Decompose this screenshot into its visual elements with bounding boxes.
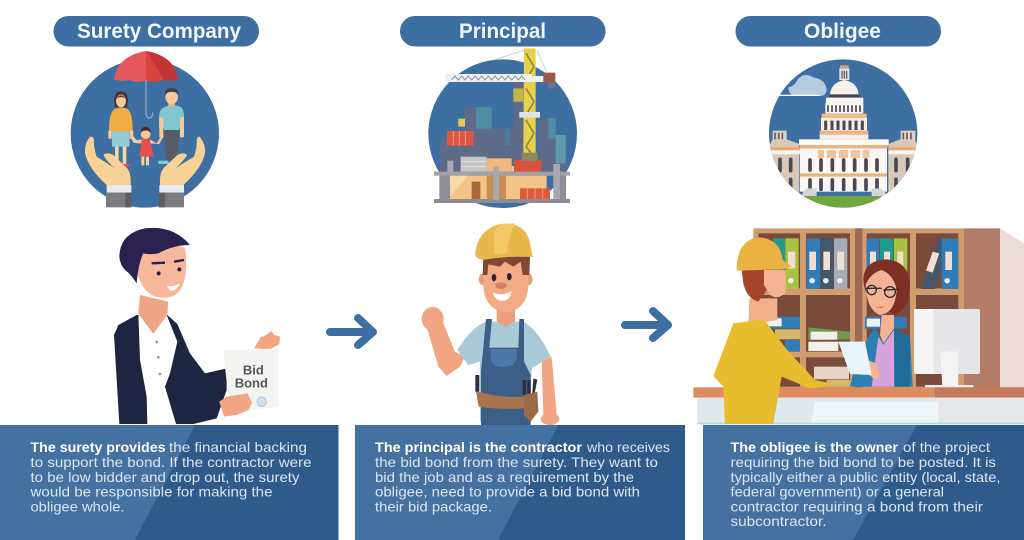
character: surety businessman with bid bond [114,228,280,424]
dome [820,65,868,139]
shirt [457,322,551,422]
text: principal: obligee, need to provide a bid bond with [375,484,640,500]
text: surety: obligee whole. [30,498,124,514]
head [479,257,533,312]
crane [445,48,555,157]
text: surety: to be low bidder and drop out, the surety [30,469,300,485]
text: obligee: federal government) or a general [730,484,944,500]
child [130,127,164,165]
monitor [914,309,980,388]
tool belt [476,391,525,409]
visitor in hard hat [713,237,827,424]
hanging load [447,119,473,146]
hard hat [475,224,533,260]
heading pill: Surety Company [54,16,259,46]
man [158,88,184,164]
character: principal construction worker [422,223,559,425]
overalls [481,319,531,425]
heading pill: Surety Company: Surety Company [77,20,241,43]
shirt [138,313,177,424]
receptionist [850,259,913,387]
lowering arm [542,357,557,415]
text: principal: bid the job and as a requirement by the [375,469,634,485]
text: obligee: typically either a public entity (local, state, [730,469,1000,485]
heading pill: Principal [400,16,606,46]
heading pill: Principal: Principal [459,20,546,43]
text: principal: who receives [586,439,670,455]
panel: principal description [355,425,685,540]
woman [108,91,133,167]
lawn [804,196,883,208]
document: Bid Bond [223,348,278,414]
text: principal: their bid package. [375,498,492,514]
icon: capitol building [767,59,920,209]
neck and head [119,228,190,333]
text: obligee: subcontractor. [730,513,826,529]
cloud [777,75,827,96]
jacket [114,315,227,424]
text: surety: would be responsible for making the [29,484,273,500]
binders [765,238,958,387]
document: Bid Bond: Bid [243,362,264,377]
text: surety: to support the bond. If the contractor were [30,454,312,470]
heading pill: Obligee [736,16,941,46]
document in hand [838,342,872,375]
raised hand [254,331,280,349]
panel: obligee description [703,425,1024,540]
panel: surety description [0,425,338,540]
building under construction [434,153,570,203]
text: obligee: of the project [903,439,990,455]
arrow: surety to principal [330,318,373,345]
side wings [770,131,918,197]
text: principal: The principal is the contractor [375,439,583,455]
raised arm [427,323,465,376]
hands [85,137,205,207]
main building [799,139,889,197]
shelving wall [753,228,1024,388]
document: Bid Bond: Bond [235,376,268,391]
text: surety: the financial backing [169,439,307,455]
hand holding document [219,393,252,417]
text: surety: The surety provides [30,439,166,455]
text: obligee: contractor requiring a bond from their [730,498,983,514]
text: obligee: The obligee is the owner [730,439,899,455]
icon: family under umbrella in protecting hands [71,51,219,208]
icon: construction site with crane [428,48,577,208]
arrow: principal to obligee [625,311,668,338]
reception counter [693,387,1024,424]
scene: obligee office reception desk [693,228,1024,424]
heading pill: Obligee: Obligee [804,20,881,43]
text: principal: the bid bond from the surety. They want to [375,454,658,470]
neck [497,305,515,327]
text: obligee: requiring the bid bond to be posted. It is [730,454,996,470]
